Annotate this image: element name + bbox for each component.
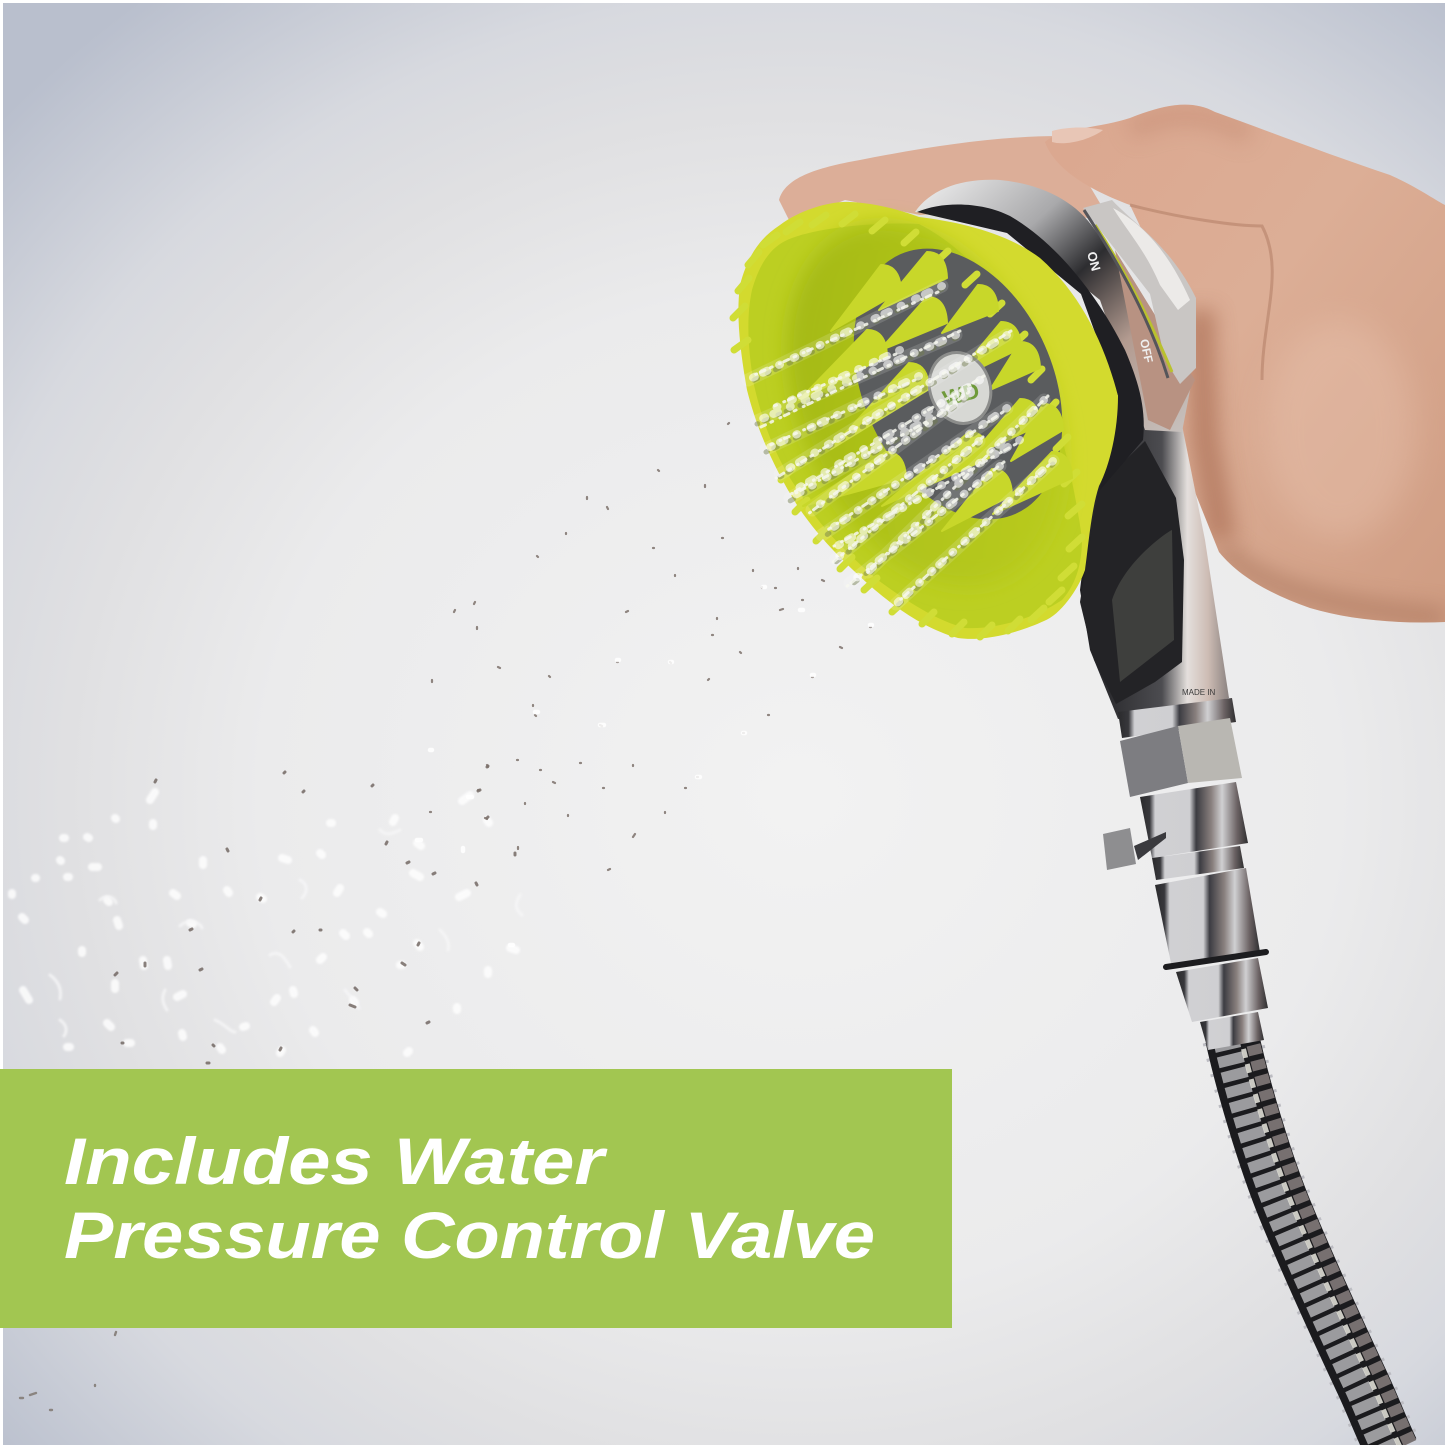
thumb crease bbox=[1130, 205, 1272, 380]
grey spray face bbox=[813, 216, 1103, 552]
jet bright core bbox=[752, 292, 1049, 600]
inner cone bbox=[734, 181, 1116, 629]
lever wheel bbox=[1103, 828, 1136, 870]
metal hose bbox=[1226, 1030, 1410, 1445]
clear knob bbox=[1083, 200, 1196, 384]
banner background bbox=[0, 1069, 952, 1328]
neck under handle bbox=[1118, 698, 1236, 738]
palm and thumb bbox=[1045, 105, 1445, 622]
soft white water blobs bbox=[12, 792, 516, 1053]
small distant specks bbox=[430, 423, 871, 870]
hex nut right face bbox=[1178, 718, 1242, 783]
thumbnail bbox=[1052, 128, 1103, 143]
centre logo badge bbox=[919, 344, 1001, 432]
rim inner surface bbox=[748, 224, 1082, 628]
hose connector fittings bbox=[1103, 698, 1268, 1050]
knob green strip bbox=[1095, 225, 1172, 372]
knob highlight bbox=[1113, 208, 1190, 310]
dark grip panel bbox=[1080, 441, 1184, 704]
water jets bbox=[748, 286, 1053, 607]
rim teeth bbox=[733, 214, 1082, 637]
knob chrome edge bbox=[1084, 210, 1168, 378]
hose rib rims bbox=[1232, 1037, 1392, 1445]
lower chrome cylinder bbox=[1176, 958, 1268, 1022]
shower handle bbox=[1080, 425, 1229, 719]
middle chrome cylinder bbox=[1155, 868, 1260, 968]
OFF label: OFF bbox=[1137, 338, 1156, 364]
upper chrome cylinder bbox=[1140, 782, 1248, 858]
grip highlight bbox=[1112, 530, 1174, 682]
palm lower shadow bbox=[1222, 548, 1445, 618]
jet shadows bbox=[748, 289, 1053, 607]
chrome handle body bbox=[1080, 425, 1229, 719]
dark droplet specks bbox=[115, 766, 515, 1063]
jet haze bbox=[748, 286, 1053, 604]
lever arm bbox=[1134, 832, 1166, 860]
hand shading bbox=[1130, 115, 1445, 618]
dark chrome ring bbox=[917, 204, 1144, 490]
hex nut left face bbox=[1120, 726, 1188, 797]
hand holding shower head bbox=[779, 105, 1445, 622]
brush bristle cones bbox=[799, 252, 1072, 531]
shower head chrome body bbox=[915, 180, 1195, 490]
jet soft glow bbox=[748, 286, 1053, 604]
knuckle tint bbox=[1130, 115, 1250, 135]
water droplets spray bbox=[12, 423, 872, 1410]
hose grey band bbox=[1226, 1039, 1386, 1445]
fingers behind head bbox=[779, 136, 1110, 222]
caption line 2: Pressure Control Valve bbox=[64, 1198, 875, 1272]
green caption banner bbox=[0, 1069, 952, 1328]
hose dark base bbox=[1232, 1037, 1392, 1445]
palm reflection on chrome bbox=[1115, 250, 1195, 430]
badge disc bbox=[919, 344, 1001, 432]
ON label: ON bbox=[1084, 250, 1104, 273]
hose neck bbox=[1200, 1012, 1264, 1050]
chrome dome bbox=[915, 180, 1192, 432]
faint water rings bbox=[50, 830, 522, 1036]
flow valve lever bbox=[1103, 828, 1166, 870]
under-banner droplets bbox=[20, 1332, 116, 1410]
pale bubbles mid-spray bbox=[417, 587, 872, 945]
hose bright streak bbox=[1240, 1034, 1400, 1445]
collar bbox=[1152, 846, 1244, 880]
black o-ring bbox=[1166, 952, 1266, 967]
outer cup body bbox=[738, 202, 1118, 639]
pressure control knob bbox=[1083, 200, 1196, 384]
made in label: MADE IN bbox=[1182, 688, 1216, 697]
hose brown band bbox=[1250, 1030, 1410, 1443]
WD logo: WD bbox=[940, 378, 982, 411]
yellow silicone brush bbox=[733, 181, 1118, 639]
shadow near handle bbox=[1200, 310, 1222, 540]
palm highlight bbox=[1272, 329, 1412, 536]
caption line 1: Includes Water bbox=[64, 1124, 608, 1198]
